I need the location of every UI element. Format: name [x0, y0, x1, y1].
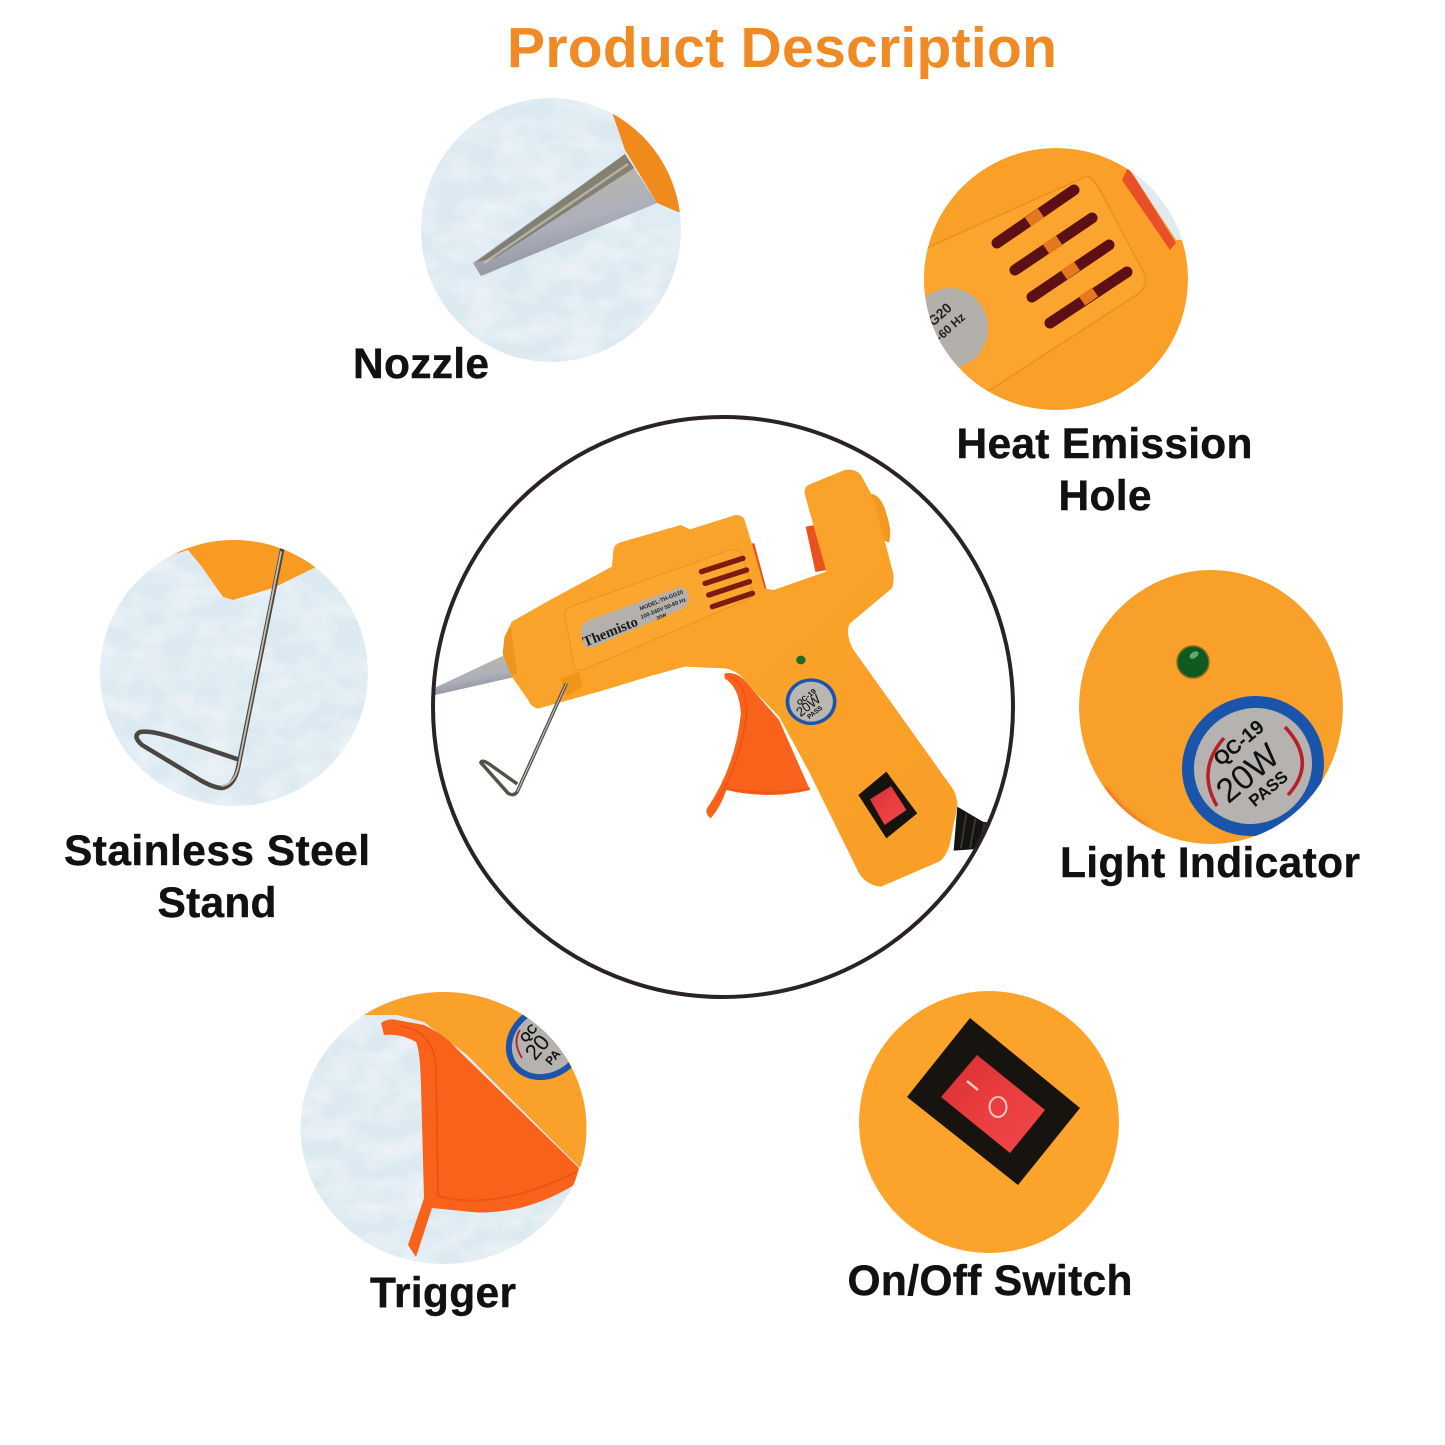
icon: QC badge crop: QC [517, 1020, 541, 1045]
brand label text: Themisto [581, 614, 640, 651]
label: on/off switch: On/Off Switch [848, 1258, 1132, 1305]
icon: QC badge crop: 20 [520, 1030, 555, 1065]
icon: grey model label: -60 Hz [933, 310, 968, 344]
icon: power cable [954, 806, 987, 851]
icon: vent slots [997, 190, 1127, 323]
icon: QC badge crop: PA [543, 1047, 564, 1068]
icon: off mark [990, 1097, 1006, 1117]
panel: on/off switch [859, 991, 1119, 1253]
icon: red rear strip [1130, 171, 1182, 240]
icon: green LED [796, 656, 806, 664]
icon: QC badge: QC-19 [1210, 716, 1269, 771]
frame circle [433, 417, 1013, 997]
icon: QC badge [786, 678, 837, 725]
brand label text: 100-240V 50-60 Hz [640, 597, 687, 621]
icon: orange trigger [381, 1019, 579, 1257]
icon: red rocker [941, 1055, 1045, 1153]
icon: power switch [858, 772, 917, 838]
icon: metal nozzle tip [473, 154, 657, 276]
icon: stand hook tab [561, 672, 583, 697]
title: Product Description [507, 16, 1057, 80]
icon: black bezel [907, 1018, 1080, 1185]
icon: on mark [967, 1081, 978, 1090]
icon: grey model label: G20 [924, 299, 955, 329]
panel: trigger detail [300, 992, 586, 1264]
brand label text [581, 590, 687, 651]
panel: stainless steel stand [98, 530, 370, 808]
icon: raised side panel [565, 549, 753, 670]
icon: gun body corner [172, 540, 316, 600]
label: stainless steel stand [64, 828, 370, 927]
icon: nose ring [503, 627, 517, 677]
badge text: 20W [793, 691, 824, 720]
badge text: QC-19 [795, 687, 818, 707]
icon: rear red parts [750, 525, 827, 590]
panel: nozzle detail [420, 96, 700, 364]
icon: QC badge: PASS [1245, 767, 1292, 811]
icon: orange gun nose [612, 114, 680, 212]
icon: grey brand label [581, 587, 689, 648]
icon: trigger [706, 673, 810, 818]
icon: grey model label [925, 288, 988, 367]
panel: central glue gun [433, 417, 1013, 997]
label: stainless steel stand: Stand [158, 880, 276, 927]
icon: gun body [364, 992, 586, 1168]
icon: QC badge [1182, 696, 1324, 836]
icon: raised vent panel [924, 176, 1146, 392]
panel: heat emission holes [924, 148, 1188, 410]
label: light indicator: Light Indicator [1060, 840, 1360, 887]
icon: QC badge crop [506, 1014, 572, 1080]
label: trigger: Trigger [370, 1270, 516, 1317]
label: nozzle: Nozzle [353, 341, 489, 388]
icon: green LED [1177, 646, 1209, 678]
icon: wire stand [136, 550, 282, 788]
icon: metal nozzle [434, 655, 513, 695]
brand label text: 20W [656, 612, 668, 622]
icon: rear cap [871, 494, 890, 543]
label: heat emission hole: Hole [1058, 473, 1152, 520]
icon: wire stand [481, 683, 566, 795]
icon: QC badge: 20W [1209, 737, 1287, 811]
icon: glue gun [434, 470, 1012, 887]
panel: light indicator [1079, 570, 1352, 864]
label: heat emission hole [956, 421, 1252, 520]
icon: gun body [503, 470, 957, 887]
icon: vent slots [702, 558, 752, 607]
badge text: PASS [806, 704, 825, 721]
brand label text: MODEL:TH-GG20 [639, 590, 684, 613]
label: stainless steel stand: Stainless Steel [64, 828, 370, 875]
label: heat emission hole: Heat Emission [956, 421, 1252, 468]
